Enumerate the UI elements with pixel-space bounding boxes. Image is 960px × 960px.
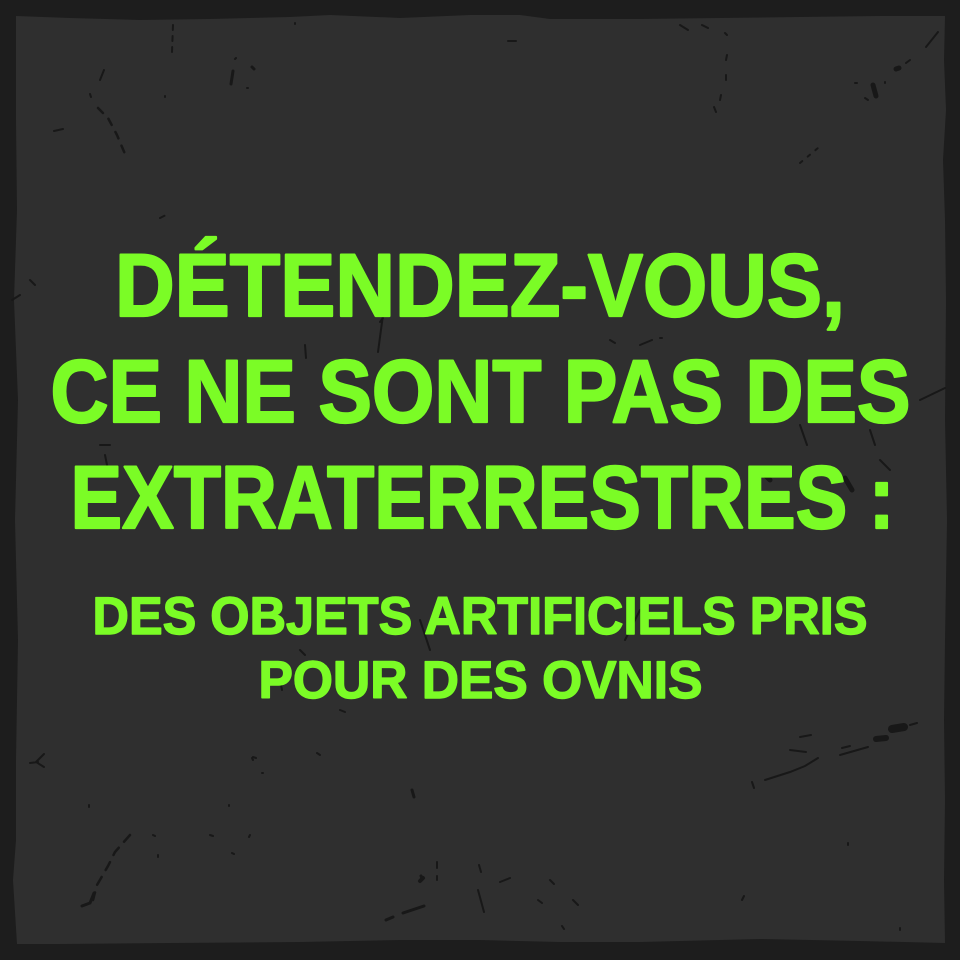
subtitle: DES OBJETS ARTIFICIELS PRIS (92, 587, 868, 646)
subtitle: POUR DES OVNIS (258, 651, 702, 710)
title: DÉTENDEZ-VOUS, (115, 235, 845, 335)
title (50, 235, 910, 547)
subtitle (92, 587, 868, 710)
